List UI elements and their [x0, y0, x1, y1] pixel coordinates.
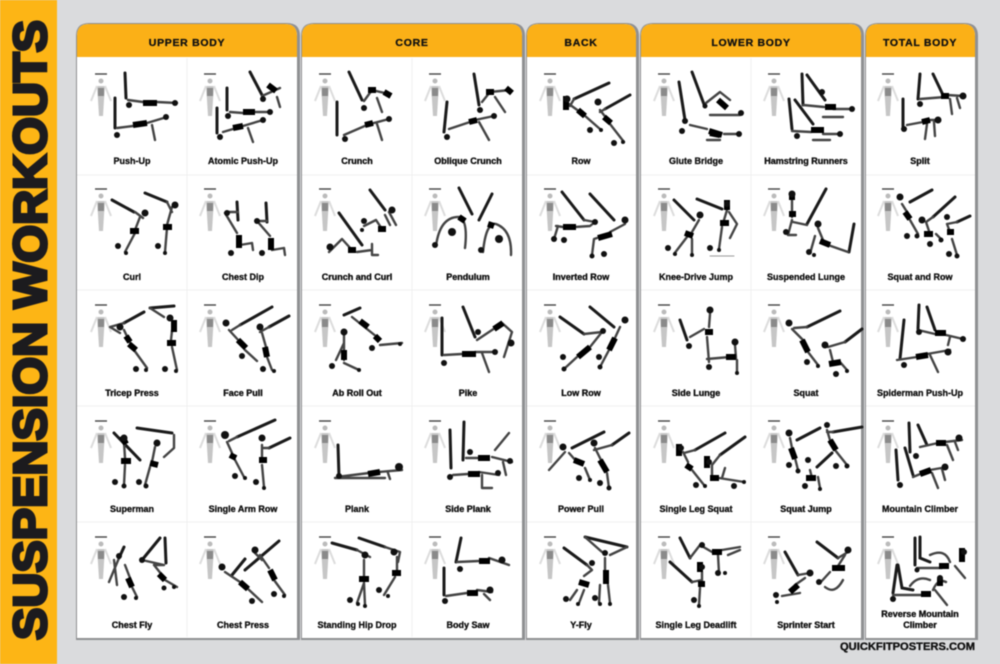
exercise: Chest Fly: Chest Fly [112, 620, 152, 630]
exercise: Standing Hip Drop [315, 537, 401, 630]
figure [444, 74, 512, 140]
exercise: Single Arm Row [200, 420, 290, 514]
exercise: Glute Bridge: Glute Bridge [669, 156, 723, 166]
exercise: Reverse Mountain Climber [878, 537, 967, 630]
figure [564, 83, 630, 146]
figure [549, 432, 629, 490]
heading: LOWER BODY [711, 37, 791, 49]
exercise: Hamstring Runners [764, 74, 855, 166]
panel: core [301, 23, 525, 640]
figure [901, 74, 966, 139]
figure [783, 189, 854, 257]
figure [337, 72, 392, 142]
figure [896, 190, 970, 258]
exercise: Y-Fly: Y-Fly [570, 620, 592, 630]
figure [432, 188, 511, 255]
exercise: Push-Up: Push-Up [114, 156, 151, 166]
figure [329, 308, 402, 372]
figure [112, 193, 178, 255]
heading: CORE [395, 37, 429, 49]
exercise: Pike: Pike [459, 388, 477, 398]
figure [442, 538, 509, 604]
exercise: Pike [425, 305, 514, 398]
figure [224, 202, 285, 256]
exercise: Chest Press: Chest Press [217, 620, 269, 630]
figure [335, 445, 403, 479]
figure [112, 428, 174, 488]
exercise: Sprinter Start: Sprinter Start [777, 620, 835, 630]
exercise: Row: Row [572, 156, 591, 166]
figure [665, 199, 737, 257]
exercise: Knee-Drive Jump: Knee-Drive Jump [659, 272, 734, 282]
figure [773, 542, 852, 604]
exercise: Squat [764, 305, 862, 398]
exercise: Knee-Drive Jump [654, 189, 737, 282]
exercise: Oblique Crunch: Oblique Crunch [434, 156, 502, 166]
exercise: Oblique Crunch [425, 74, 512, 166]
figure [786, 311, 862, 377]
figure [679, 72, 744, 140]
figure [217, 72, 280, 142]
exercise: Reverse Mountain Climber: Climber [903, 620, 937, 630]
exercise: Suspended Lunge [764, 189, 854, 282]
figure [680, 306, 739, 375]
exercise: Plank: Plank [345, 504, 370, 514]
panel: upper body [76, 23, 300, 640]
panel: back [526, 23, 639, 640]
figure [670, 538, 740, 608]
exercise: Glute Bridge [654, 72, 744, 166]
figure [441, 307, 514, 372]
exercise: Curl: Curl [123, 272, 141, 282]
exercise: Squat and Row: Squat and Row [888, 272, 953, 282]
figure [332, 538, 401, 608]
exercise: Tricep Press: Tricep Press [105, 388, 159, 398]
exercise: Standing Hip Drop: Standing Hip Drop [318, 620, 397, 630]
panel: total body [865, 23, 978, 640]
exercise: Side Plank: Side Plank [445, 504, 492, 514]
figure [789, 74, 855, 140]
heading: UPPER BODY [149, 37, 225, 49]
exercise: Ab Roll Out: Ab Roll Out [332, 388, 382, 398]
exercise: Pendulum: Pendulum [446, 272, 490, 282]
exercise: Side Lunge [654, 305, 739, 398]
exercise: Suspended Lunge: Suspended Lunge [767, 272, 845, 282]
exercise: Y-Fly [540, 537, 627, 630]
exercise: Squat Jump: Squat Jump [780, 504, 832, 514]
exercise: Chest Dip [200, 189, 285, 282]
exercise: Chest Fly [91, 537, 177, 630]
exercise: Single Arm Row: Single Arm Row [209, 504, 278, 514]
exercise: Pendulum [425, 188, 511, 282]
figure [563, 537, 627, 606]
exercise: Crunch and Curl [315, 189, 396, 282]
exercise: Single Leg Deadlift: Single Leg Deadlift [655, 620, 737, 630]
panel: lower body [640, 23, 864, 640]
exercise: Reverse Mountain Climber: Reverse Mountain [881, 609, 959, 619]
figure [221, 420, 290, 490]
exercise: Sprinter Start [764, 537, 852, 630]
exercise: Hamstring Runners: Hamstring Runners [764, 156, 848, 166]
exercise: Face Pull [200, 305, 289, 398]
exercise: Side Plank [425, 421, 513, 514]
exercise: Split: Split [910, 156, 930, 166]
exercise: Low Row: Low Row [561, 388, 602, 398]
figure [786, 422, 862, 491]
exercise: Squat and Row [878, 189, 970, 282]
figure [222, 307, 289, 373]
exercise: Superman [91, 421, 174, 514]
exercise: Atomic Push-Up: Atomic Push-Up [208, 156, 278, 166]
exercise: Mountain Climber [878, 421, 962, 514]
exercise: Ab Roll Out [315, 305, 402, 398]
figure [896, 423, 962, 488]
figure [447, 422, 513, 488]
heading: TOTAL BODY [883, 37, 957, 49]
exercise: Chest Dip: Chest Dip [222, 272, 264, 282]
exercise: Squat: Squat [793, 388, 819, 398]
exercise: Single Leg Deadlift [654, 537, 740, 630]
exercise: Push-Up [91, 73, 178, 166]
figure [326, 190, 396, 255]
exercise: Single Leg Squat [654, 421, 746, 514]
figure [114, 73, 178, 140]
figure [551, 192, 628, 258]
figure [890, 537, 967, 605]
side banner with title [0, 0, 57, 664]
figure [678, 433, 746, 489]
exercise: Squat Jump [764, 421, 862, 514]
exercise: Face Pull: Face Pull [223, 388, 263, 398]
figure [218, 541, 286, 604]
exercise: Inverted Row [540, 189, 628, 282]
exercise: Power Pull [540, 421, 629, 514]
exercise: Superman: Superman [110, 504, 154, 514]
figure [897, 305, 966, 372]
exercise: Inverted Row: Inverted Row [553, 272, 610, 282]
exercise: Spiderman Push-Up [877, 305, 966, 398]
title: SUSPENSION WORKOUTS [4, 20, 56, 640]
exercise: Curl [91, 189, 178, 282]
exercise: Plank [315, 421, 403, 514]
exercise: Side Lunge: Side Lunge [672, 388, 720, 398]
exercise: Atomic Push-Up [200, 72, 280, 166]
figure [110, 306, 178, 373]
exercise: Body Saw: Body Saw [446, 620, 491, 630]
figure [560, 307, 628, 372]
figure [109, 538, 177, 600]
exercise: Mountain Climber: Mountain Climber [882, 504, 958, 514]
exercise: Body Saw [425, 537, 509, 630]
exercise: Crunch and Curl: Crunch and Curl [322, 272, 392, 282]
exercise: Split [878, 74, 966, 166]
exercise: Power Pull: Power Pull [558, 504, 604, 514]
exercise: Crunch [315, 72, 392, 166]
heading: BACK [564, 37, 598, 49]
exercise: Single Leg Squat: Single Leg Squat [659, 504, 733, 514]
exercise: Chest Press [200, 537, 286, 630]
exercise: Spiderman Push-Up: Spiderman Push-Up [877, 388, 964, 398]
exercise: Crunch: Crunch [341, 156, 373, 166]
exercise: Low Row [540, 305, 628, 398]
exercise: Tricep Press [91, 305, 178, 398]
website credit: QUICKFITPOSTERS.COM [840, 641, 975, 653]
exercise: Row [540, 74, 630, 166]
